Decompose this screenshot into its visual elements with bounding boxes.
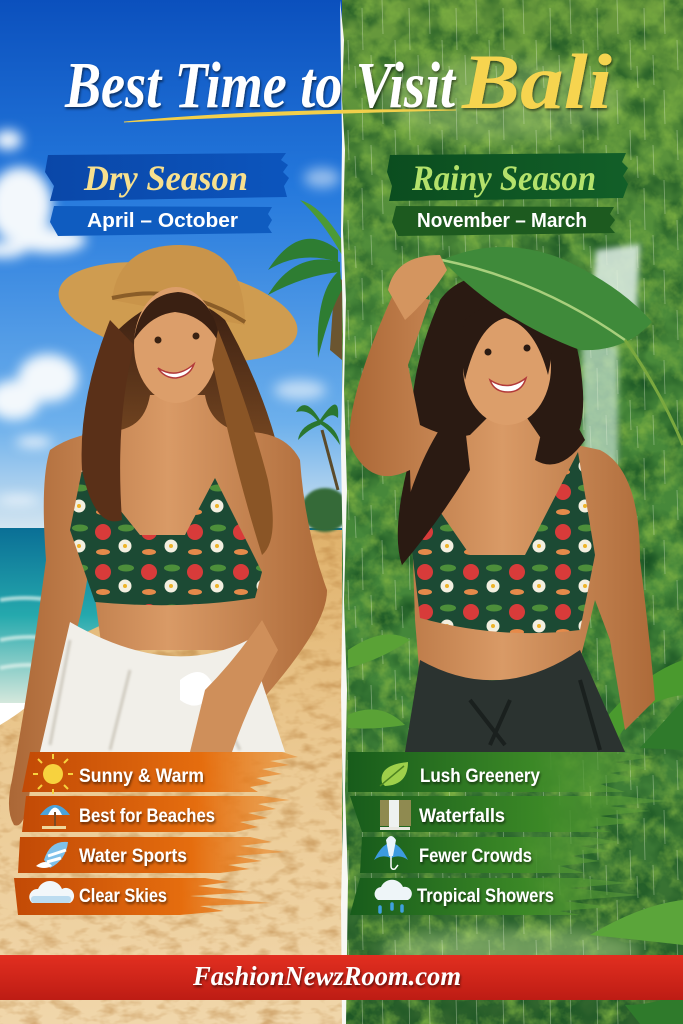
tropical leaves <box>348 634 683 1024</box>
list item: fewer crowds: Fewer Crowds <box>419 846 532 867</box>
title: Best Time to Visit <box>64 49 456 122</box>
panel: dry season beach scene <box>0 0 349 1024</box>
panel: rainy season jungle scene <box>342 0 683 1024</box>
rainy season months <box>392 206 615 236</box>
title underline <box>124 110 456 122</box>
figure: woman in straw hat on the beach <box>9 245 327 826</box>
list item: tropical showers: Tropical Showers <box>417 886 554 907</box>
dry season heading: Dry Season <box>83 158 248 198</box>
floral top <box>70 440 262 605</box>
figure: woman under a leaf in the rain <box>350 247 683 752</box>
dry season heading <box>45 153 289 201</box>
list item: water sports <box>36 842 187 868</box>
website footer banner: FashionNewzRoom.com <box>192 961 461 991</box>
list item: water sports: Water Sports <box>79 846 187 867</box>
list item: waterfalls <box>380 800 505 830</box>
large green leaf <box>442 247 683 445</box>
list item: sunny and warm <box>33 754 204 794</box>
rainy season heading: Rainy Season <box>411 158 596 198</box>
list item: lush greenery <box>380 762 540 787</box>
list item: clear skies <box>29 881 167 907</box>
dark trousers <box>405 650 625 752</box>
list item: best for beaches: Best for Beaches <box>79 806 215 827</box>
list item: waterfalls: Waterfalls <box>419 806 505 827</box>
list item: lush greenery: Lush Greenery <box>420 766 540 787</box>
dry season months <box>50 206 272 236</box>
clouds <box>0 130 340 504</box>
list item: fewer crowds <box>374 836 532 869</box>
dry season months: April – October <box>87 210 238 232</box>
rainy season months: November – March <box>417 210 587 232</box>
website footer banner <box>0 955 683 1000</box>
floral top <box>412 452 595 633</box>
list item: sunny and warm: Sunny & Warm <box>79 766 204 787</box>
list item: tropical showers <box>375 880 554 912</box>
straw hat <box>51 245 305 378</box>
waterfall <box>582 244 640 465</box>
palm trees <box>268 200 349 532</box>
list item: best for beaches <box>40 805 215 829</box>
panel: dry season highlights <box>14 752 298 915</box>
center torn divider <box>340 0 348 1024</box>
panel: rainy season highlights <box>348 752 668 915</box>
white sarong <box>40 622 285 752</box>
list item: clear skies: Clear Skies <box>79 886 167 907</box>
title: Bali <box>461 38 612 125</box>
